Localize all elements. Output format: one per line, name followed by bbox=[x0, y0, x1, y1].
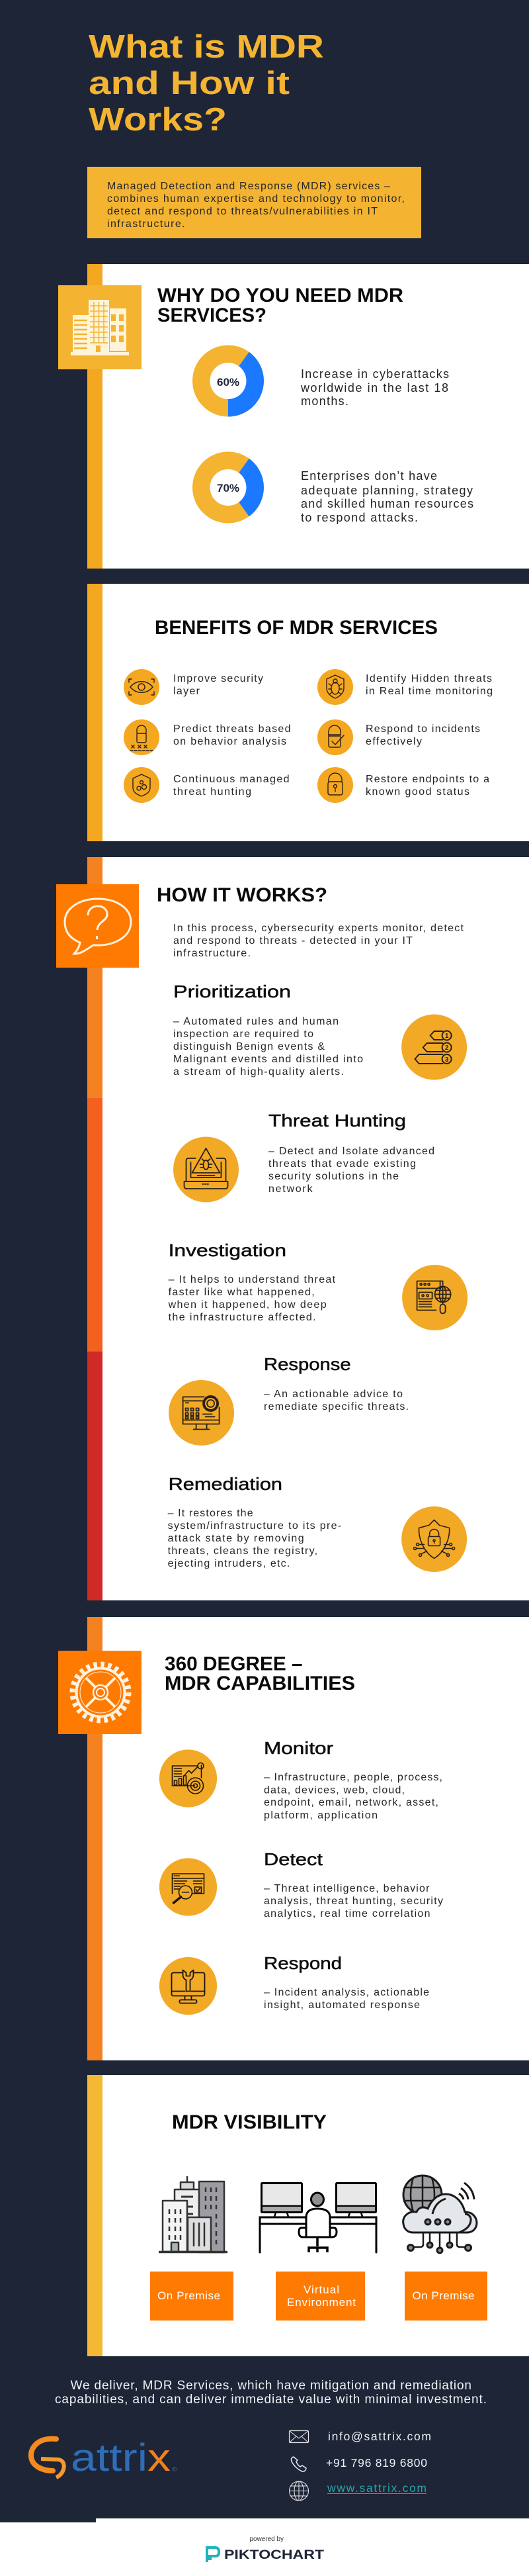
step: threat hunting: network bbox=[268, 1183, 313, 1195]
intro callout bbox=[87, 167, 421, 238]
capability: monitor: – Infrastructure, people, process, bbox=[264, 1772, 442, 1783]
title bbox=[89, 29, 324, 138]
benefit: respond to incidents: effectively bbox=[366, 736, 422, 747]
text: 60% description: worldwide in the last 18 bbox=[300, 381, 448, 394]
closing statement: capabilities, and can deliver immediate value with minimal investment. bbox=[55, 2393, 487, 2407]
text: 70% description: and skilled human resources bbox=[301, 497, 473, 510]
title: and How it bbox=[89, 66, 290, 101]
text: 60% description bbox=[300, 367, 449, 408]
logo: Piktochart mark bbox=[207, 2548, 219, 2562]
step: investigation: faster like what happened, bbox=[169, 1287, 315, 1298]
closing statement bbox=[55, 2379, 487, 2407]
benefit: restore endpoints: Restore endpoints to a bbox=[366, 774, 489, 785]
icon: ranked arrows: 3 bbox=[445, 1056, 449, 1064]
icon: desk with two monitors bbox=[260, 2183, 376, 2252]
contact: website: www.sattrix.com bbox=[327, 2481, 427, 2495]
heading: SERVICES? bbox=[157, 304, 266, 326]
title: Works? bbox=[89, 102, 227, 138]
benefit: identify hidden threats: in Real time monitoring bbox=[366, 686, 493, 697]
label: virtual environment: Virtual bbox=[304, 2283, 339, 2296]
step: threat hunting: Threat Hunting bbox=[268, 1111, 406, 1130]
step: response: Response bbox=[264, 1354, 351, 1374]
step: response: – An actionable advice to bbox=[264, 1389, 403, 1400]
panel: why do you need MDR services bbox=[58, 264, 529, 569]
capability: detect: – Threat intelligence, behavior bbox=[264, 1883, 430, 1894]
step: threat hunting: security solutions in the bbox=[268, 1171, 399, 1182]
capability: monitor: endpoint, email, network, asset, bbox=[264, 1797, 438, 1808]
intro text: infrastructure. bbox=[173, 948, 251, 959]
capability: monitor: Monitor bbox=[264, 1738, 333, 1758]
icon: ranked arrows: 2 bbox=[445, 1044, 449, 1052]
icon: office buildings bbox=[58, 285, 142, 369]
wordmark: PIKTOCHART bbox=[224, 2548, 324, 2562]
step: response bbox=[169, 1354, 409, 1446]
step: prioritization bbox=[173, 982, 467, 1080]
text: 70% description: to respond attacks. bbox=[301, 511, 418, 524]
label: on premise bbox=[150, 2272, 233, 2321]
heading bbox=[165, 1653, 355, 1694]
icon: city buildings bbox=[159, 2176, 227, 2252]
benefit: predict threats: on behavior analysis bbox=[173, 736, 286, 747]
benefit: improve security layer: layer bbox=[173, 686, 200, 697]
benefit: continuous threat hunting bbox=[124, 767, 290, 803]
logo: Sattrix: attri x bbox=[71, 2436, 171, 2479]
heading bbox=[157, 285, 403, 326]
text: 70% description bbox=[301, 469, 473, 524]
benefit: respond to incidents: Respond to incidents bbox=[366, 723, 480, 735]
label: on premise cloud bbox=[405, 2272, 487, 2321]
benefit: predict threats bbox=[124, 719, 291, 755]
text: 60% description: Increase in cyberattacks bbox=[301, 367, 449, 381]
intro text bbox=[173, 923, 464, 959]
closing statement: We deliver, MDR Services, which have mitigation and remediation bbox=[71, 2379, 471, 2393]
donut chart: 70% bbox=[192, 451, 264, 523]
capability: detect: analytics, real time correlation bbox=[264, 1908, 430, 1919]
text: 60% description: months. bbox=[301, 394, 348, 408]
icon: ranked arrows bbox=[401, 1014, 467, 1080]
benefit: improve security layer bbox=[124, 669, 263, 705]
icon: web search bbox=[402, 1265, 468, 1330]
step: prioritization: distinguish Benign events & bbox=[173, 1041, 325, 1052]
text: 70% description: adequate planning, strategy bbox=[301, 484, 473, 497]
icon: search window bbox=[159, 1858, 217, 1916]
label: on premise: On Premise bbox=[157, 2289, 220, 2302]
step: remediation bbox=[168, 1474, 467, 1572]
capability: detect bbox=[159, 1849, 443, 1919]
contact: website bbox=[290, 2481, 427, 2501]
benefit: identify hidden threats: Identify Hidden threats bbox=[366, 673, 492, 684]
icon: monitor with gear bbox=[169, 1380, 234, 1446]
panel: benefits of MDR services bbox=[87, 584, 529, 841]
step: prioritization: Malignant events and distilled into bbox=[173, 1054, 363, 1065]
label: virtual environment bbox=[276, 2272, 365, 2321]
icon: analytics dashboard bbox=[159, 1749, 217, 1808]
footer: powered by Piktochart bbox=[0, 2518, 529, 2576]
capability: respond: insight, automated response bbox=[264, 2000, 420, 2011]
capability: detect: analysis, threat hunting, security bbox=[264, 1896, 443, 1907]
intro callout: infrastructure. bbox=[107, 218, 185, 230]
label: virtual environment: Environment bbox=[287, 2296, 356, 2309]
footer: powered by Piktochart: powered by bbox=[250, 2535, 284, 2543]
intro text: In this process, cybersecurity experts monitor, detect bbox=[173, 923, 464, 934]
logo: Sattrix bbox=[31, 2436, 177, 2479]
label: on premise cloud: On Premise bbox=[413, 2289, 475, 2302]
icon: shield with lock and circuits bbox=[401, 1506, 467, 1572]
intro callout: combines human expertise and technology to monitor, bbox=[107, 193, 405, 205]
logo: Sattrix: ® bbox=[172, 2466, 177, 2473]
heading: BENEFITS OF MDR SERVICES bbox=[155, 617, 438, 639]
benefit: restore endpoints bbox=[317, 767, 489, 803]
step: prioritization: a stream of high-quality alerts. bbox=[173, 1066, 344, 1078]
step: remediation: Remediation bbox=[169, 1474, 282, 1494]
text: 70% description: Enterprises don’t have bbox=[301, 469, 437, 483]
intro text: and respond to threats - detected in your IT bbox=[173, 935, 413, 946]
step: remediation: threats, cleans the registry, bbox=[168, 1545, 317, 1557]
icon: cloud network bbox=[403, 2176, 477, 2253]
icon: laptop alert bbox=[173, 1137, 239, 1202]
benefit: identify hidden threats bbox=[317, 669, 493, 705]
contact: phone bbox=[291, 2456, 427, 2471]
step: investigation: when it happened, how deep bbox=[168, 1299, 327, 1311]
step: prioritization: inspection are required to bbox=[173, 1029, 313, 1040]
capability: respond: – Incident analysis, actionable bbox=[264, 1987, 429, 1998]
contact: email: info@sattrix.com bbox=[328, 2430, 431, 2443]
intro callout: detect and respond to threats/vulnerabilities in IT bbox=[107, 206, 378, 217]
heading: 360 DEGREE – bbox=[165, 1653, 303, 1675]
step: remediation: ejecting intruders, etc. bbox=[168, 1558, 290, 1569]
heading: MDR CAPABILITIES bbox=[165, 1673, 355, 1694]
step: investigation: Investigation bbox=[169, 1240, 286, 1260]
step: prioritization: Prioritization bbox=[173, 982, 291, 1001]
step: threat hunting bbox=[173, 1111, 434, 1202]
benefit: restore endpoints: known good status bbox=[366, 786, 469, 798]
icon: ranked arrows: 1 bbox=[445, 1033, 449, 1040]
capability: monitor: data, devices, web, cloud, bbox=[264, 1784, 405, 1796]
capability: respond: Respond bbox=[264, 1953, 342, 1973]
step: investigation: – It helps to understand threat bbox=[169, 1274, 336, 1285]
icon: question speech bubble bbox=[56, 884, 139, 968]
step: response: remediate specific threats. bbox=[264, 1401, 409, 1412]
step: threat hunting: threats that evade existing bbox=[268, 1158, 416, 1170]
benefit: predict threats: Predict threats based bbox=[173, 723, 291, 735]
heading: WHY DO YOU NEED MDR bbox=[157, 285, 403, 306]
panel: 360 degree MDR capabilities bbox=[58, 1617, 529, 2060]
step: threat hunting: – Detect and Isolate advanced bbox=[268, 1146, 434, 1157]
step: remediation: system/infrastructure to its pre- bbox=[168, 1520, 341, 1532]
intro callout: Managed Detection and Response (MDR) services – bbox=[107, 181, 390, 192]
title: What is MDR bbox=[89, 29, 324, 65]
donut chart: 60%: 60% bbox=[217, 376, 239, 389]
capability: detect: Detect bbox=[264, 1849, 323, 1869]
step: investigation: the infrastructure affected. bbox=[169, 1312, 316, 1323]
capability: monitor bbox=[159, 1738, 442, 1821]
heading: MDR VISIBILITY bbox=[172, 2111, 327, 2133]
benefit: improve security layer: Improve security bbox=[173, 673, 263, 684]
step: remediation: – It restores the bbox=[168, 1508, 253, 1519]
panel: MDR visibility bbox=[87, 2075, 529, 2356]
benefit: continuous threat hunting: threat hunting bbox=[173, 786, 251, 798]
capability: monitor: platform, application bbox=[264, 1810, 378, 1821]
icon: monitor with wrench bbox=[159, 1957, 217, 2015]
heading: HOW IT WORKS? bbox=[157, 884, 327, 906]
step: prioritization: – Automated rules and human bbox=[173, 1016, 339, 1027]
donut chart: 60% bbox=[192, 345, 264, 417]
capability: respond bbox=[159, 1953, 429, 2015]
donut chart: 70%: 70% bbox=[217, 482, 239, 494]
step: investigation bbox=[168, 1240, 468, 1330]
panel: how it works bbox=[56, 857, 529, 1600]
benefit: respond to incidents bbox=[317, 719, 480, 755]
benefit: continuous threat hunting: Continuous managed bbox=[173, 774, 290, 785]
contact: phone: +91 796 819 6800 bbox=[326, 2456, 427, 2469]
step: remediation: attack state by removing bbox=[168, 1533, 304, 1544]
icon: gear bbox=[58, 1651, 142, 1734]
